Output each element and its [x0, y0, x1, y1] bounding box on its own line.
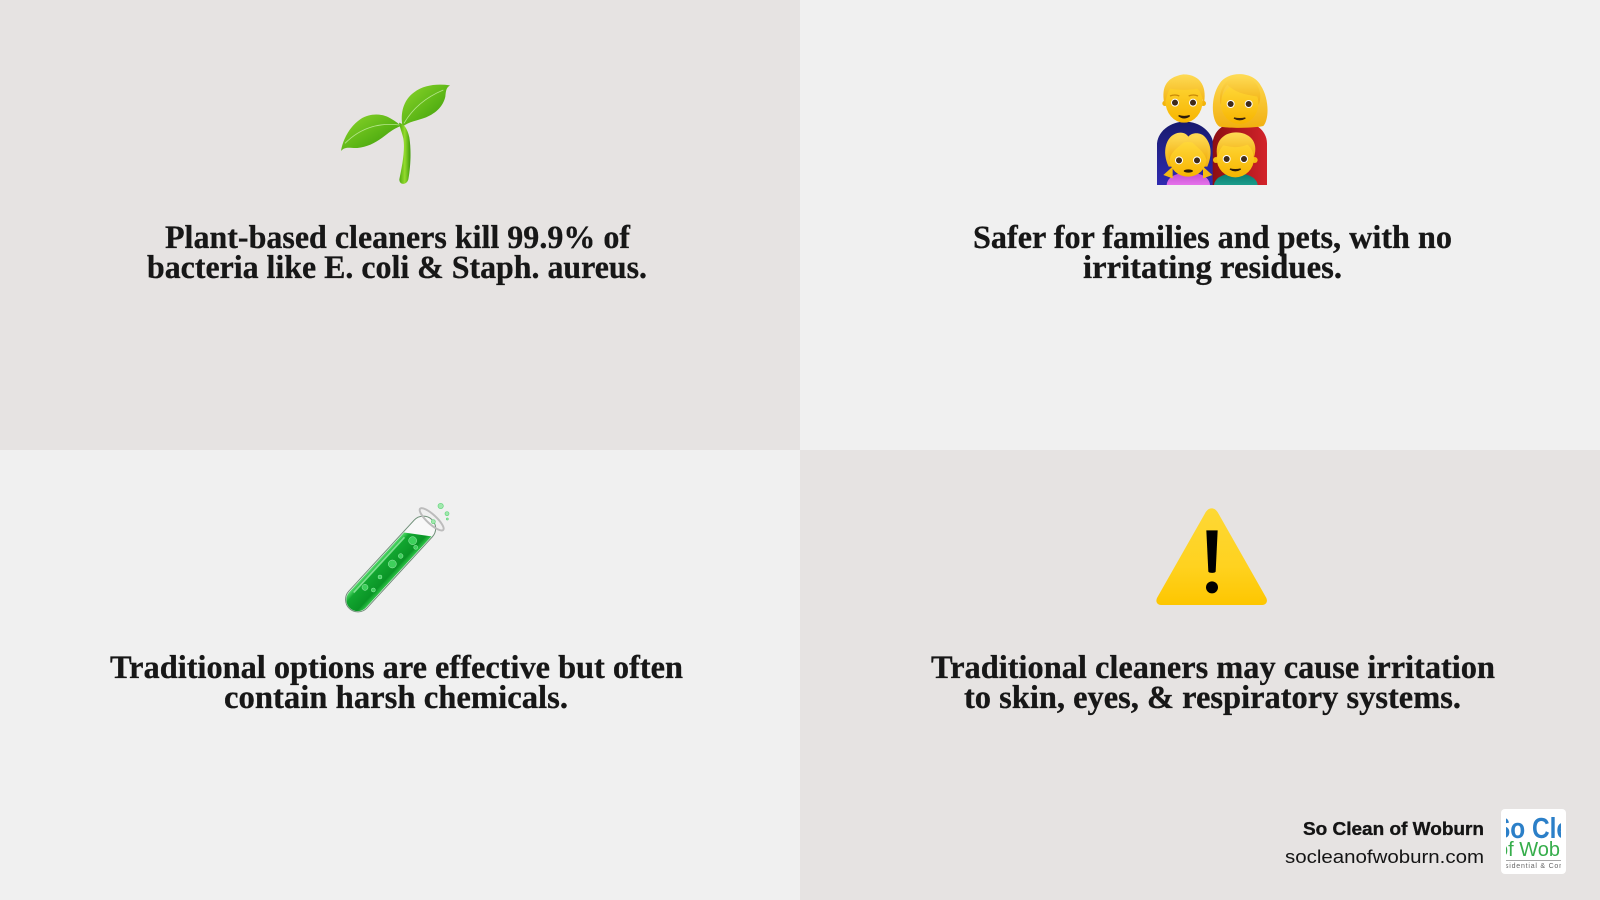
logo: [1501, 809, 1566, 874]
logo: sidential & Con: [1505, 863, 1563, 870]
heading: plant-based cleaners: Plant-based cleaners kill 99.9% of: [165, 220, 631, 256]
heading: traditional cleaners risks: to skin, eyes, & respiratory systems.: [964, 680, 1461, 716]
heading: traditional options: [110, 650, 683, 716]
logo: of Wobu: [1497, 839, 1571, 861]
heading: plant-based cleaners: [147, 220, 647, 286]
heading: traditional cleaners risks: [931, 650, 1495, 716]
icon: seedling: [341, 85, 450, 184]
panel: traditional cleaners risks: [800, 450, 1600, 900]
man: [1162, 100, 1166, 106]
woman: [1213, 74, 1268, 128]
logo: So Cle: [1494, 813, 1570, 845]
brand block: [1285, 809, 1571, 874]
heading: safer for families: Safer for families and pets, with no: [973, 220, 1452, 256]
heading: safer for families: [973, 220, 1452, 286]
boy: [1214, 173, 1258, 185]
panel: safer for families: [974, 74, 1451, 286]
brand website: socleanofwoburn.com: [1285, 846, 1484, 867]
icon: test tube: [338, 503, 449, 619]
brand name: So Clean of Woburn: [1303, 819, 1484, 839]
heading: traditional cleaners risks: Traditional cleaners may cause irritation: [931, 650, 1495, 686]
heading: safer for families: irritating residues.: [1083, 250, 1342, 286]
icon: warning sign: [1156, 508, 1267, 605]
icon: family: [1157, 74, 1268, 185]
panel: plant-based cleaners: [0, 0, 800, 450]
heading: plant-based cleaners: bacteria like E. coli & Staph. aureus.: [147, 250, 647, 286]
girl: [1167, 173, 1210, 185]
panel: traditional options: [0, 450, 800, 900]
heading: traditional options: contain harsh chemicals.: [224, 680, 568, 716]
heading: traditional options: Traditional options are effective but often: [110, 650, 683, 686]
